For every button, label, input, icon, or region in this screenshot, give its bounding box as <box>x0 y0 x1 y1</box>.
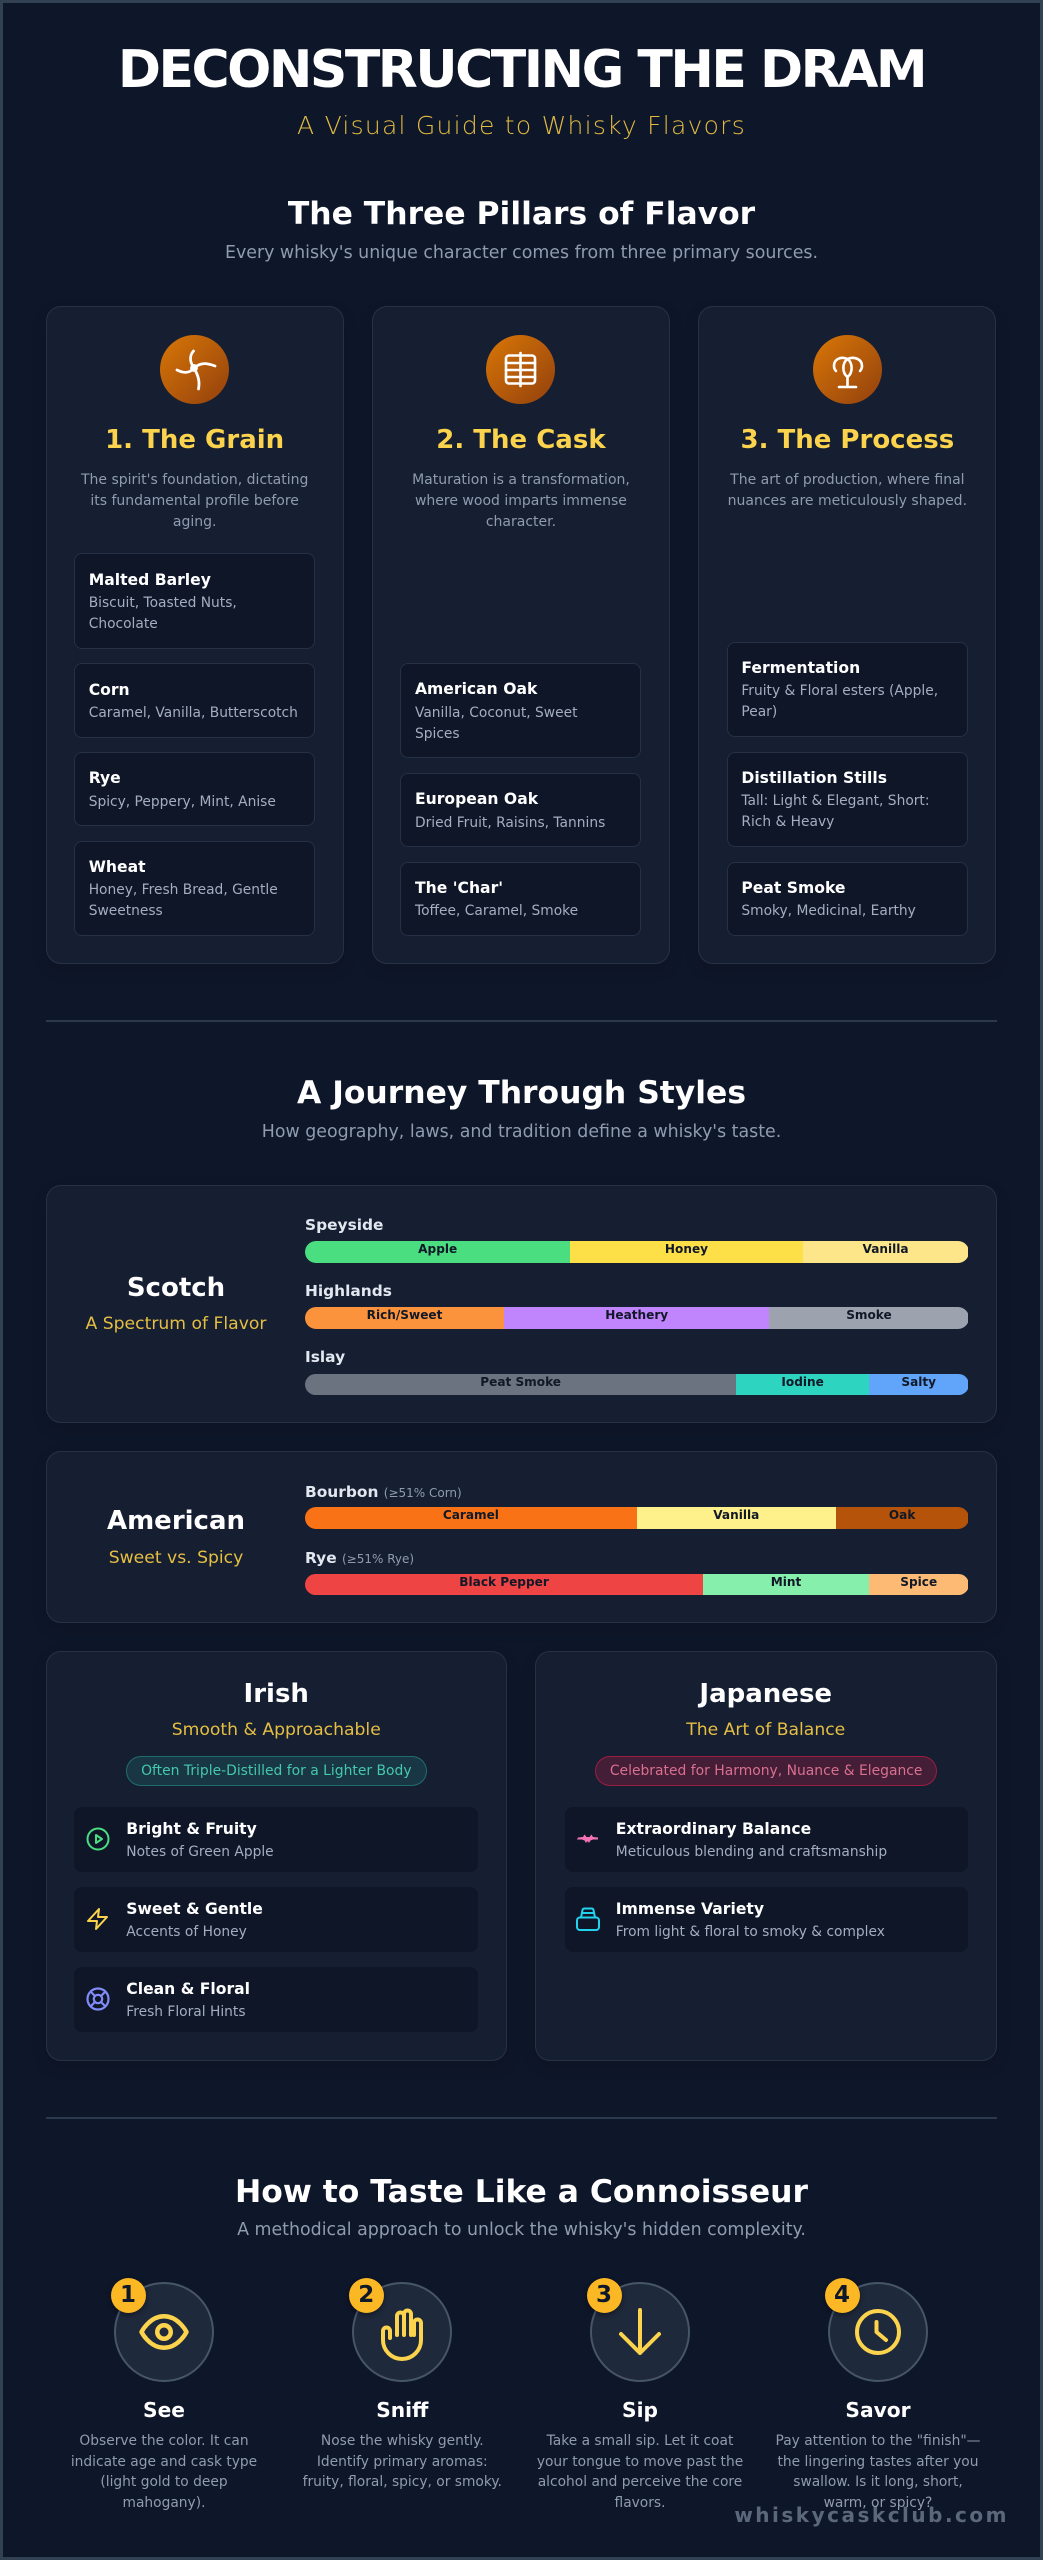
step description: your tongue to move past the <box>537 2454 743 2470</box>
item: the char: The 'Char' <box>415 879 503 897</box>
icon: lightning <box>87 1908 108 1930</box>
item: rye: Spicy, Peppery, Mint, Anise <box>89 794 276 810</box>
pill: harmony <box>595 1756 937 1786</box>
step description: Identify primary aromas: <box>317 2454 488 2470</box>
row text: Extraordinary Balance <box>616 1820 811 1838</box>
label: speyside: Speyside <box>305 1216 383 1234</box>
step description: Pay attention to the "finish"— <box>776 2433 980 2449</box>
item: the char <box>400 862 641 936</box>
heading: tasting: How to Taste Like a Connoisseur <box>235 2174 808 2210</box>
item: malted barley: Chocolate <box>89 616 158 632</box>
label: highlands: Highlands <box>305 1282 392 1300</box>
item: malted barley: Biscuit, Toasted Nuts, <box>89 595 237 611</box>
badge: 3 <box>586 2278 622 2313</box>
pillar heading: 2. The Cask <box>436 425 606 455</box>
icon: still <box>813 335 882 404</box>
panel: the grain <box>46 306 344 964</box>
item: american oak <box>400 663 641 758</box>
pill: triple distilled: Often Triple-Distilled for a Lighter Body <box>141 1763 412 1779</box>
bar: speyside: Apple <box>418 1242 457 1256</box>
heading: three pillars: The Three Pillars of Flavor <box>288 196 755 232</box>
badge: 4: 4 <box>834 2282 850 2308</box>
panel: american <box>46 1451 996 1623</box>
step description: fruity, floral, spicy, or smoky. <box>303 2474 502 2490</box>
row: bright and fruity <box>74 1807 478 1872</box>
icon: eye <box>114 2282 214 2382</box>
row: immense variety <box>564 1887 968 1952</box>
step description: mahogany). <box>122 2495 205 2511</box>
step: see <box>71 2278 257 2511</box>
row description: Meticulous blending and craftsmanship <box>616 1844 887 1860</box>
item: corn <box>74 663 315 738</box>
item: peat smoke: Smoky, Medicinal, Earthy <box>741 903 916 919</box>
step description: alcohol and perceive the core <box>538 2474 742 2490</box>
panel: irish <box>46 1651 507 2061</box>
badge: 4 <box>824 2278 860 2313</box>
step description: warm, or spicy? <box>824 2495 932 2511</box>
item: corn: Corn <box>89 681 130 699</box>
bar: rye: Mint <box>771 1574 801 1588</box>
bar: highlands <box>305 1307 968 1329</box>
icon: arrow down <box>590 2282 690 2382</box>
subtitle: A Visual Guide to Whisky Flavors <box>297 111 746 140</box>
pillar description <box>728 472 967 508</box>
american tagline: Sweet vs. Spicy <box>109 1548 243 1568</box>
item: malted barley: Malted Barley <box>89 571 211 589</box>
item: distillation stills: Rich & Heavy <box>741 814 834 830</box>
pillar description: where wood imparts immense <box>415 492 627 508</box>
badge: 1: 1 <box>120 2282 136 2308</box>
item: fermentation: Pear) <box>741 704 777 720</box>
item: the char: Toffee, Caramel, Smoke <box>415 903 578 919</box>
icon: grain pinwheel <box>160 335 229 404</box>
pillar description: The spirit's foundation, dictating <box>81 472 308 488</box>
pillar description: its fundamental profile before <box>90 492 299 508</box>
item: american oak: American Oak <box>415 680 537 698</box>
step description <box>71 2433 257 2511</box>
bar: bourbon: Caramel <box>443 1508 499 1522</box>
item: fermentation <box>727 642 968 737</box>
step name: Sip <box>622 2398 658 2422</box>
bar: rye: Spice <box>900 1574 937 1588</box>
bar: speyside: Honey <box>665 1242 708 1256</box>
irish tagline: Smooth & Approachable <box>172 1720 381 1740</box>
pillar description: Maturation is a transformation, <box>412 472 630 488</box>
item: wheat <box>74 841 315 936</box>
item: distillation stills: Distillation Stills <box>741 769 887 787</box>
scotch tagline: A Spectrum of Flavor <box>86 1314 266 1334</box>
irish name: Irish <box>244 1679 309 1709</box>
bar: bourbon: Oak <box>889 1508 915 1522</box>
pillar description <box>412 472 630 530</box>
row: sweet and gentle <box>74 1887 478 1952</box>
japanese name: Japanese <box>699 1679 832 1709</box>
step: sip <box>537 2278 743 2511</box>
subheading: tasting: A methodical approach to unlock the whisky's hidden complexity. <box>237 2220 806 2240</box>
icon: stacked box <box>576 1908 600 1931</box>
row: clean and floral <box>74 1967 478 2032</box>
bar: highlands: Heathery <box>605 1308 668 1322</box>
step description <box>537 2433 743 2511</box>
item: distillation stills: Tall: Light & Elegant, Short: <box>741 793 930 809</box>
pillar description: aging. <box>173 514 216 530</box>
item: european oak: Dried Fruit, Raisins, Tannins <box>415 815 605 831</box>
scotch name: Scotch <box>127 1273 225 1303</box>
item: peat smoke <box>727 862 968 936</box>
pillar description: The art of production, where final <box>730 472 965 488</box>
item: peat smoke: Peat Smoke <box>741 879 846 897</box>
step description <box>776 2433 980 2511</box>
item: european oak: European Oak <box>415 790 538 808</box>
bar: islay: Peat Smoke <box>480 1374 561 1388</box>
icon: balance wings <box>577 1834 598 1843</box>
step description <box>302 2433 502 2490</box>
row description: Fresh Floral Hints <box>126 2004 246 2020</box>
label: bourbon: Bourbon (≥51% Corn) <box>305 1483 462 1501</box>
subheading: journey: How geography, laws, and tradition define a whisky's taste. <box>262 1122 781 1142</box>
bar: speyside: Vanilla <box>862 1242 909 1256</box>
row description: Accents of Honey <box>126 1924 247 1940</box>
bar: islay: Salty <box>901 1374 936 1388</box>
item: wheat: Honey, Fresh Bread, Gentle <box>89 882 278 898</box>
row text: Sweet & Gentle <box>126 1900 263 1918</box>
bar: bourbon <box>305 1507 968 1529</box>
badge: 2 <box>349 2278 384 2313</box>
badge: 3: 3 <box>596 2282 612 2308</box>
step description: Nose the whisky gently. <box>321 2433 484 2449</box>
panel: japanese <box>535 1651 996 2061</box>
label: islay: Islay <box>305 1348 345 1366</box>
icon: hand <box>352 2282 452 2382</box>
icon: clock <box>828 2282 928 2382</box>
icon: life buoy <box>86 1987 110 2011</box>
pill: harmony: Celebrated for Harmony, Nuance & Elegance <box>610 1763 922 1779</box>
bar: speyside <box>305 1241 968 1263</box>
american name: American <box>107 1506 245 1536</box>
pillar heading: 1. The Grain <box>105 425 284 455</box>
panel: the process <box>698 306 996 964</box>
bar: rye: Black Pepper <box>459 1574 549 1588</box>
icon: cask <box>486 335 555 404</box>
item: rye <box>74 752 315 826</box>
row text: Bright & Fruity <box>126 1820 257 1838</box>
item: corn: Caramel, Vanilla, Butterscotch <box>89 705 298 721</box>
step description: flavors. <box>614 2495 666 2511</box>
bar: highlands: Smoke <box>846 1308 892 1322</box>
pill: triple distilled <box>126 1756 427 1786</box>
item: fermentation: Fruity & Floral esters (Apple, <box>741 683 938 699</box>
pillar description: nuances are meticulously shaped. <box>728 492 967 508</box>
bar: islay: Iodine <box>781 1374 824 1388</box>
step name: See <box>143 2398 185 2422</box>
step description: the lingering tastes after you <box>778 2454 978 2470</box>
step description: Take a small sip. Let it coat <box>547 2433 733 2449</box>
item: wheat: Wheat <box>89 858 146 876</box>
item: american oak: Spices <box>415 726 460 742</box>
item: rye: Rye <box>89 769 121 787</box>
icon: play circle <box>86 1828 110 1850</box>
row: extraordinary balance <box>564 1807 968 1872</box>
japanese tagline: The Art of Balance <box>686 1720 845 1740</box>
panel: the cask <box>372 306 670 964</box>
row text: Immense Variety <box>616 1900 764 1918</box>
step description: (light gold to deep <box>100 2474 228 2490</box>
badge: 2: 2 <box>358 2282 374 2308</box>
item: wheat: Sweetness <box>89 903 163 919</box>
heading: journey: A Journey Through Styles <box>297 1075 746 1111</box>
step description: swallow. Is it long, short, <box>793 2474 963 2490</box>
row text: Clean & Floral <box>126 1980 250 1998</box>
label: rye: Rye (≥51% Rye) <box>305 1549 414 1567</box>
bar: islay <box>305 1374 968 1395</box>
subheading: three pillars: Every whisky's unique character comes from three primary sources. <box>225 243 818 263</box>
step name: Savor <box>845 2398 911 2422</box>
watermark: whiskycaskclub.com <box>734 2503 1009 2527</box>
row description: Notes of Green Apple <box>126 1844 274 1860</box>
step name: Sniff <box>376 2398 428 2422</box>
title: DECONSTRUCTING THE DRAM <box>118 40 925 100</box>
panel: scotch <box>46 1185 996 1423</box>
step description: indicate age and cask type <box>71 2454 257 2470</box>
bar: bourbon: Vanilla <box>713 1508 759 1522</box>
bar: highlands: Rich/Sweet <box>367 1308 442 1322</box>
step: sniff <box>302 2278 502 2490</box>
item: american oak: Vanilla, Coconut, Sweet <box>415 705 577 721</box>
step description: Observe the color. It can <box>79 2433 249 2449</box>
item: european oak <box>400 773 641 847</box>
step: savor <box>776 2278 980 2511</box>
pillar description <box>80 472 308 530</box>
item: fermentation: Fermentation <box>741 659 860 677</box>
item: distillation stills <box>727 752 968 847</box>
row description: From light & floral to smoky & complex <box>616 1924 885 1940</box>
pillar heading: 3. The Process <box>740 425 954 455</box>
item: malted barley <box>74 553 315 649</box>
pillar description: character. <box>486 514 556 530</box>
bar: rye <box>305 1574 968 1595</box>
badge: 1 <box>110 2278 146 2313</box>
